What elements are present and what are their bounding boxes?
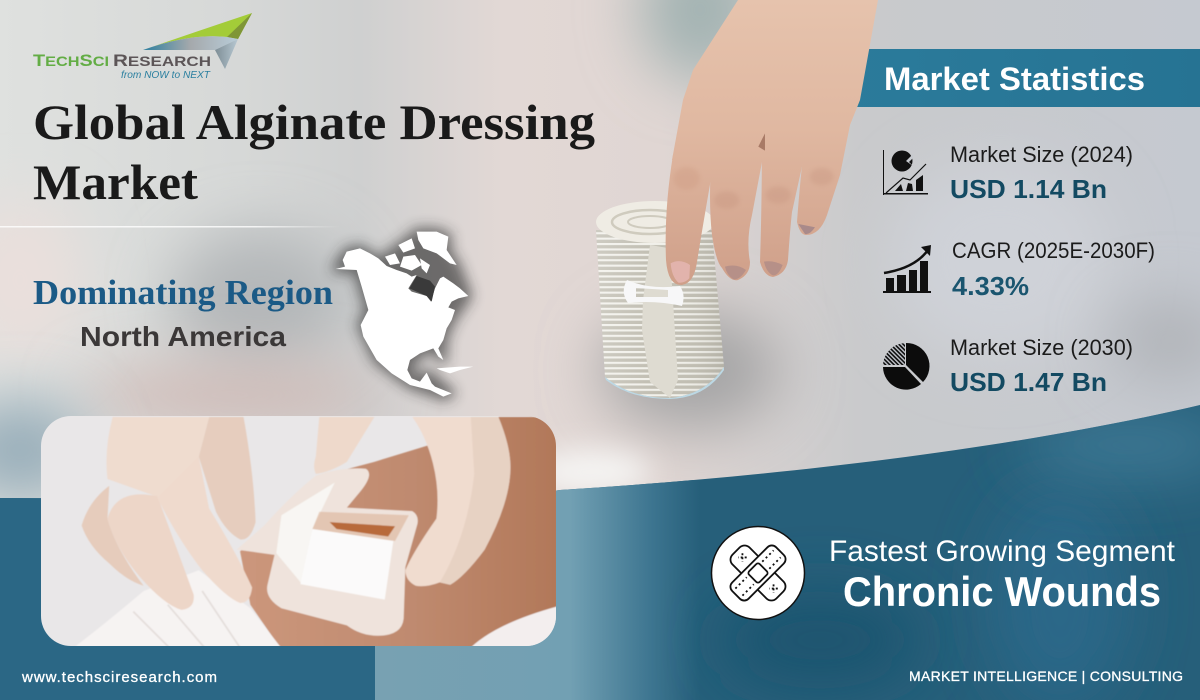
back of hand: [672, 0, 878, 172]
icon: rising bars with arrow: [883, 245, 931, 293]
stat: market size 2030: Market Size (2030): [950, 335, 1133, 360]
left glove rear finger: [199, 417, 256, 539]
arm: [240, 417, 557, 655]
lower blue band: [0, 400, 1200, 700]
bandage roll: [596, 201, 724, 399]
logo: TechSci Research: from NOW to NEXT: [121, 69, 212, 81]
stat: CAGR: CAGR (2025E-2030F): [952, 238, 1155, 263]
stat: market size 2024: [883, 142, 1133, 204]
fastest growing segment text: Fastest Growing Segment: [829, 535, 1176, 568]
left glove finger C: [82, 486, 144, 586]
logo: TechSci Research: [33, 13, 252, 81]
title: Global Alginate Dressing: [33, 94, 595, 150]
market statistics header bar: [850, 49, 1200, 107]
fastest growing segment text: [829, 535, 1176, 615]
left glove finger A: [157, 457, 252, 603]
cloth right: [471, 606, 556, 646]
dominating region text: North America: [80, 321, 286, 352]
footer tagline: MARKET INTELLIGENCE | CONSULTING: [909, 668, 1183, 684]
logo: TechSci Research: RESEARCH: [113, 51, 211, 70]
logo: TechSci Research: TECH SCI: [33, 51, 109, 70]
fastest growing segment text: Chronic Wounds: [843, 568, 1161, 615]
right glove thumb: [314, 417, 374, 474]
icon: pie chart: [883, 343, 929, 390]
bandage clip: [624, 280, 684, 306]
footer website: www.techsciresearch.com: [21, 669, 217, 686]
map: North America: [336, 232, 473, 397]
icon: pie and growth chart: [883, 150, 928, 195]
ring finger: [760, 130, 810, 277]
stat: CAGR: [883, 238, 1155, 301]
index finger: [666, 150, 716, 285]
middle finger: [710, 130, 768, 280]
stat: market size 2024: USD 1.14 Bn: [950, 174, 1107, 204]
market statistics header bar: Market Statistics: [884, 61, 1145, 97]
knuckle shading: [671, 133, 834, 283]
dominating region text: Dominating Region: [33, 273, 333, 312]
cloth left: [64, 570, 287, 655]
stat: market size 2030: USD 1.47 Bn: [950, 367, 1107, 397]
wound stain: [312, 512, 409, 541]
wound dressing photo: [41, 416, 557, 655]
stat: CAGR: 4.33%: [952, 271, 1029, 301]
icon: bandage badge: [712, 526, 804, 620]
hand: [666, 0, 878, 285]
title: Market: [33, 154, 198, 210]
absorbent pad: [300, 529, 393, 600]
dominating region text: [33, 273, 333, 352]
stat: market size 2024: Market Size (2024): [950, 142, 1133, 167]
left glove back: [107, 417, 209, 498]
left glove finger B: [107, 494, 194, 610]
stat: market size 2030: [883, 335, 1133, 397]
right glove: [405, 417, 510, 586]
title: [33, 94, 595, 210]
pinky: [797, 125, 850, 235]
dressing: [237, 468, 418, 636]
